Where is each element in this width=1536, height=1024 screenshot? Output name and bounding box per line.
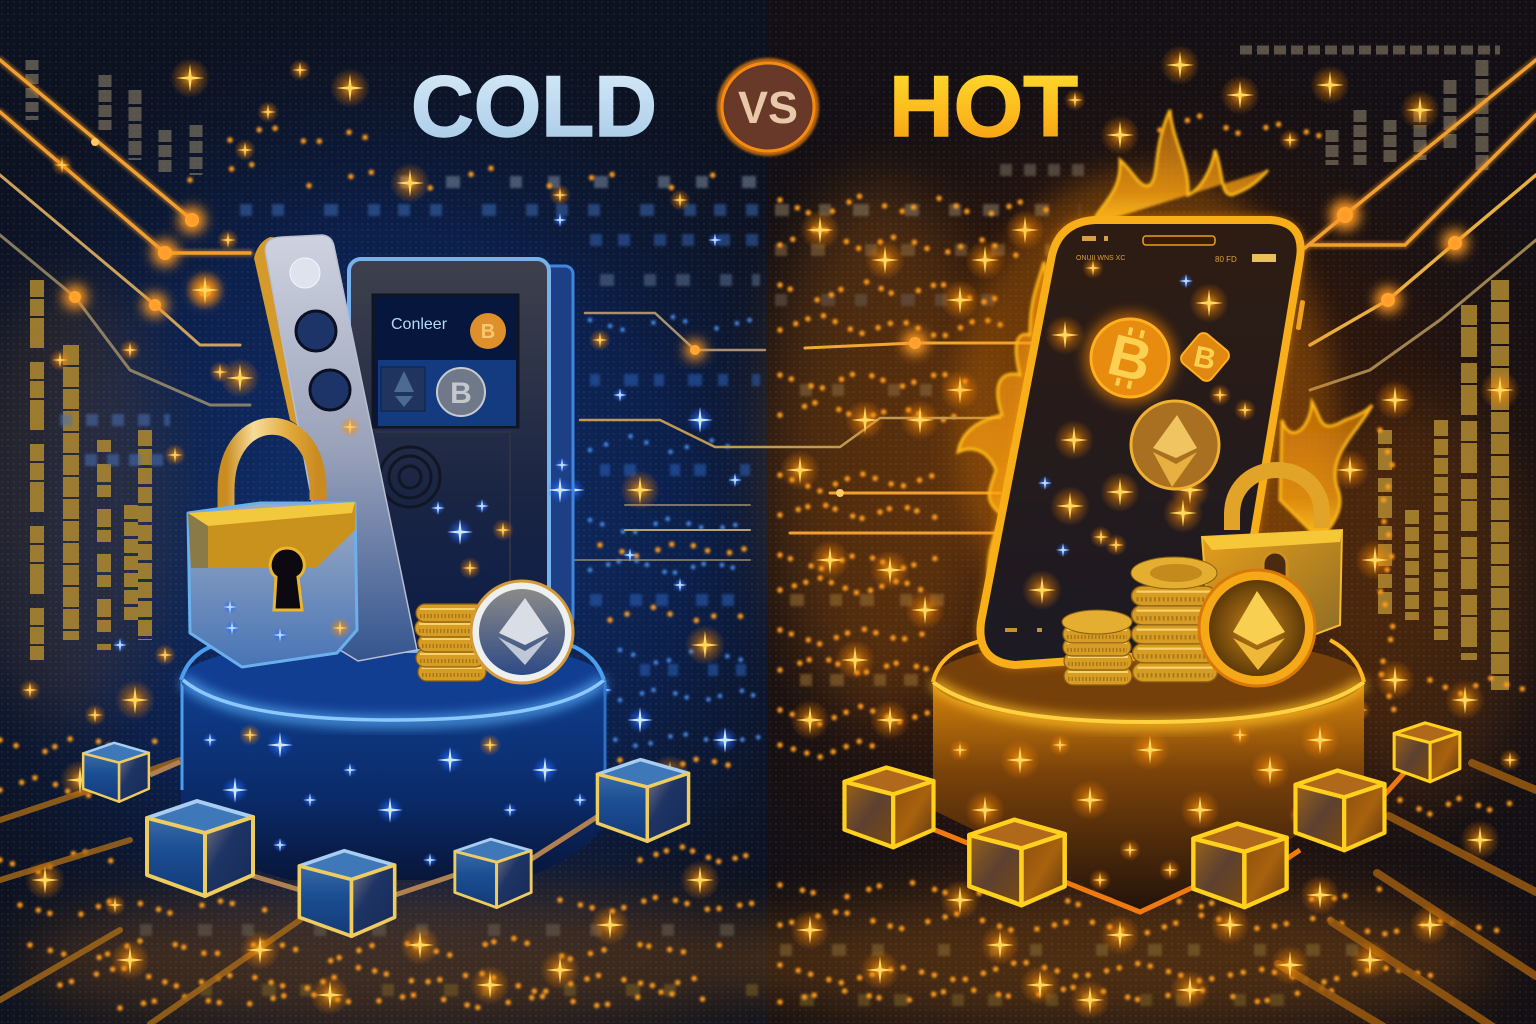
vs badge	[721, 62, 815, 152]
panel: cold wallet	[181, 235, 606, 880]
bitcoin tile	[1178, 330, 1232, 384]
hot podium	[933, 636, 1364, 912]
vs badge: VS	[738, 82, 798, 133]
smartphone	[980, 220, 1305, 665]
smartphone: 80 FD	[1215, 255, 1237, 264]
device screen label: Conleer	[391, 316, 448, 333]
flames	[955, 110, 1372, 670]
ethereum coin on screen	[1131, 401, 1219, 489]
title: hot: HOT	[889, 59, 1078, 155]
title: cold: COLD	[411, 59, 657, 155]
cold podium	[181, 638, 606, 880]
circuit lines: right	[1278, 60, 1536, 1024]
hardware wallet stick	[254, 235, 417, 661]
hot cubes	[844, 723, 1460, 912]
bitcoin tile: B	[1191, 340, 1219, 377]
ethereum coin front	[1199, 570, 1315, 686]
coin stacks	[1062, 557, 1218, 685]
status bar text: ONUII WNS XC	[1076, 255, 1125, 262]
ethereum coin	[471, 581, 573, 683]
hot padlock	[1202, 470, 1342, 640]
bitcoin coin: B	[1102, 322, 1158, 395]
circuit lines: centre	[575, 235, 1030, 880]
hardware wallet card: B	[481, 321, 495, 343]
circuit lines: left	[0, 60, 300, 1024]
bitcoin coin	[1084, 312, 1176, 404]
panel: hot wallet	[933, 110, 1372, 912]
coin stack	[415, 604, 486, 681]
padlock	[188, 426, 357, 667]
hardware wallet card	[349, 259, 573, 651]
cold cubes	[83, 743, 689, 936]
hardware wallet card: B	[450, 377, 472, 410]
